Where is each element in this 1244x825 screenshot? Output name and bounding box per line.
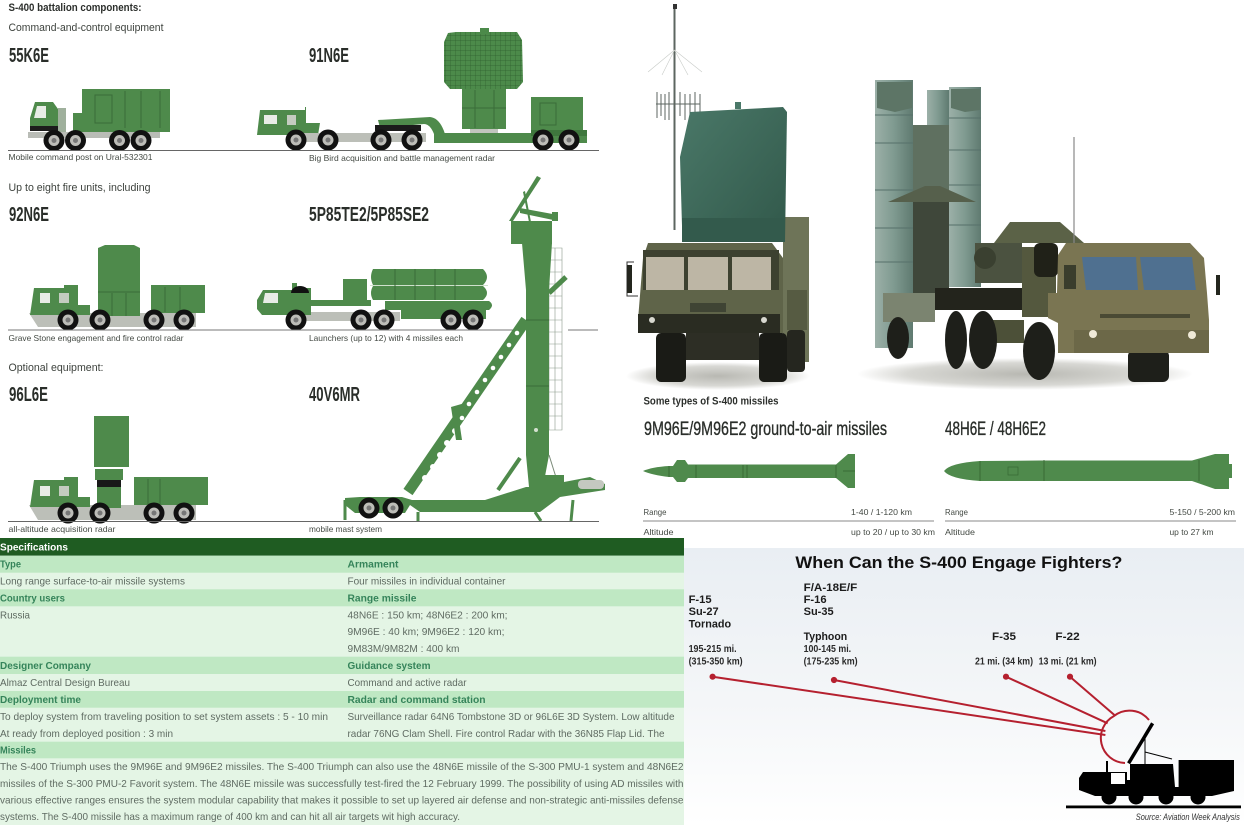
label: 9M96E: 9M96E/9M96E2 ground-to-air missiles [644, 419, 887, 440]
frame [913, 125, 949, 195]
row: deployment and radar: radar 76NG Clam Shell. Fire control Radar with the 36N85 Flap Lid. The [348, 728, 665, 740]
vehicle: 91N6E radar transporter [257, 28, 587, 150]
group: F-35 [975, 631, 1033, 668]
mast boom [408, 277, 566, 492]
group: F-22: F-22 [1055, 631, 1080, 643]
ground line row 2 [8, 329, 598, 331]
caption: 55K6E: Mobile command post on Ural-532301 [8, 152, 153, 162]
ground line row 3 [8, 521, 599, 522]
tube centre [927, 90, 949, 150]
row: users and range: 9M83M/9M82M : 400 km [348, 643, 460, 655]
row: designer and guidance: Guidance system [348, 660, 430, 672]
radar panel [680, 107, 787, 242]
panel: specifications table [0, 538, 684, 825]
group: medium range fighters: F/A-18E/F [804, 582, 857, 594]
cab [1048, 243, 1209, 353]
group: medium range fighters: 100-145 mi. [804, 643, 851, 655]
heading: missile types: Some types of S-400 missiles [644, 396, 778, 408]
row: deployment and radar: Deployment time [0, 694, 81, 706]
spec: 9M96E [643, 507, 935, 537]
detection lines [710, 674, 1149, 763]
group: medium range fighters: Typhoon [804, 631, 847, 643]
ground line row 1 [8, 150, 599, 151]
row: missiles: The S-400 Triumph uses the 9M96E and 9M96E2 missiles. The S-400 Triumph can also use the 48N6E missile of the S-300 PMU-1 system and 48N6E2 [0, 761, 684, 773]
trailer [345, 475, 605, 513]
panel: battalion components [8, 2, 605, 534]
row: designer and guidance: Almaz Central Design Bureau [0, 677, 130, 689]
vehicle: 5P85 launcher [257, 269, 492, 330]
spec: 9M96E: Altitude [644, 527, 674, 537]
vehicle: 92N6E engagement radar [29, 245, 205, 330]
group: medium range fighters: F-16 [804, 594, 827, 606]
row: type: Armament [348, 558, 399, 570]
table header: Specifications [0, 542, 68, 554]
group: long range fighters: F-15 [689, 594, 712, 606]
mast head [509, 176, 558, 244]
caption: 92N6E: Grave Stone engagement and fire control radar [8, 333, 184, 343]
row: deployment and radar: Surveillance radar 64N6 Tombstone 3D or 96L6E 3D System. Low altitude [348, 711, 675, 723]
missile: 48H6E [944, 454, 1232, 489]
row: deployment and radar: Radar and command station [348, 694, 486, 706]
row: designer and guidance: Command and active radar [348, 677, 467, 689]
subheading: command and control: Command-and-control equipment [8, 22, 164, 34]
spec: 48H6E: Range [945, 507, 968, 517]
wheels [887, 317, 909, 359]
icon: radar truck silhouette [1066, 723, 1241, 808]
row: missiles: missiles of the S-300 PMU-2 Favorit system. The 48N6E missile was successfully test-fired the 12 February 1999. The possibility of using AD missiles with [0, 778, 684, 790]
spec: 48H6E: 5-150 / 5-200 km [1170, 507, 1235, 517]
group: medium range fighters: Su-35 [804, 606, 834, 618]
row: users and range [0, 592, 508, 655]
tube right [949, 87, 981, 287]
label: 40V6MR: 40V6MR [309, 383, 360, 406]
row: deployment and radar: To deploy system from traveling position to set system assets : 5 - 10 min [0, 711, 328, 723]
group: long range fighters: Su-27 [689, 606, 719, 618]
side body [783, 217, 809, 362]
row: missiles [0, 744, 684, 823]
row: missiles: systems. The S-400 missile has a maximum range of 400 km and can hit all air targets wit high accuracy. [0, 811, 460, 823]
label: 48H6E: 48H6E / 48H6E2 [945, 419, 1046, 440]
subheading: optional equipment: Optional equipment: [8, 362, 104, 374]
row: users and range: Russia [0, 610, 30, 622]
row: type: Type [0, 558, 21, 570]
generator unit [994, 222, 1084, 243]
spec: 48H6E [945, 507, 1236, 537]
group: F-35: 21 mi. (34 km) [975, 656, 1033, 668]
label: 5P85TE2/5P85SE2: 5P85TE2/5P85SE2 [309, 203, 429, 226]
tube left [875, 80, 913, 348]
chart title: When Can the S-400 Engage Fighters? [795, 553, 1122, 572]
row: deployment and radar [0, 694, 675, 740]
row: type: Four missiles in individual container [348, 576, 506, 588]
spec: 48H6E: up to 27 km [1170, 527, 1214, 537]
caption: 40V6MR: mobile mast system [309, 524, 382, 534]
row: type [0, 558, 506, 588]
wheels [656, 333, 686, 382]
cab [638, 243, 783, 333]
group: F-35: F-35 [992, 631, 1016, 643]
group: medium range fighters: (175-235 km) [804, 656, 858, 668]
missile: 9M96E [643, 454, 855, 488]
label: 92N6E: 92N6E [9, 203, 49, 226]
row: users and range: Range missile [348, 592, 417, 604]
strut [451, 403, 468, 440]
photo: launcher truck [857, 80, 1220, 390]
group: F-22: 13 mi. (21 km) [1039, 656, 1097, 668]
heading: battalion components: S-400 battalion components: [8, 2, 142, 14]
mast ladder [549, 248, 562, 430]
spec: 9M96E: up to 20 / up to 30 km [851, 527, 935, 537]
row: designer and guidance [0, 660, 467, 689]
row: designer and guidance: Designer Company [0, 660, 91, 672]
caption: 96L6E: all-altitude acquisition radar [8, 524, 116, 534]
vehicle: 96L6E acquisition radar [29, 416, 208, 524]
group: long range fighters [689, 594, 743, 668]
vehicle: 55K6E command post [28, 89, 170, 151]
row: deployment and radar: At ready from deployed position : 3 min [0, 728, 173, 740]
panel: missile types [643, 396, 1236, 537]
row: missiles: Missiles [0, 744, 36, 756]
row: users and range: Country users [0, 592, 65, 604]
photo: radar truck [626, 4, 810, 390]
label: 91N6E: 91N6E [309, 44, 349, 67]
spec: 9M96E: Range [644, 507, 667, 517]
group: medium range fighters [804, 582, 858, 668]
antenna [1073, 137, 1075, 243]
group: long range fighters: Tornado [689, 618, 731, 630]
group: long range fighters: (315-350 km) [689, 656, 743, 668]
label: 55K6E: 55K6E [9, 44, 49, 67]
panel: engagement chart [684, 548, 1244, 825]
group: F-22 [1039, 631, 1097, 668]
row: users and range: 48N6E : 150 km; 48N6E2 : 200 km; [348, 610, 508, 622]
row: users and range: 9M96E : 40 km; 9M96E2 : 120 km; [348, 626, 504, 638]
spec: 48H6E: Altitude [945, 527, 975, 537]
group: long range fighters: 195-215 mi. [689, 643, 737, 655]
spec: 9M96E: 1-40 / 1-120 km [851, 507, 912, 517]
antenna mast [674, 7, 676, 230]
rear deck [883, 293, 935, 322]
caption: 91N6E: Big Bird acquisition and battle management radar [309, 153, 495, 163]
row: type: Long range surface-to-air missile systems [0, 576, 185, 588]
label: 96L6E: 96L6E [9, 383, 48, 406]
caption: launchers: Launchers (up to 12) with 4 missiles each [309, 333, 463, 343]
row: missiles: various effective ranges ensures the system modular capability that makes it possible to set up layered air defense and non-strategic anti-missiles defense [0, 794, 684, 806]
subheading: fire units: Up to eight fire units, including [8, 182, 150, 194]
vehicle: 40V6MR mobile mast [345, 176, 605, 521]
mast column [522, 243, 552, 492]
